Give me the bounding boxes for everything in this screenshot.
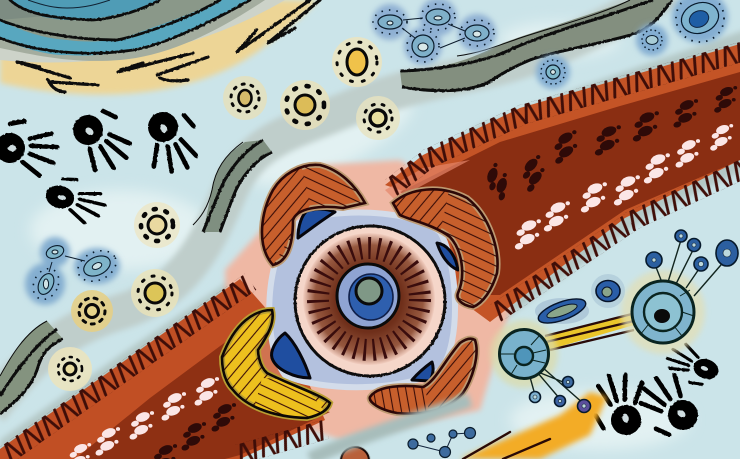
- sun: 245,98: [223, 76, 267, 120]
- dark footprints, upper track: [477, 85, 737, 203]
- blue waterhole: 553,72: [536, 55, 570, 89]
- tan band dashes: [17, 0, 320, 92]
- boomerang: top-left: [259, 162, 370, 268]
- large circle: [632, 281, 694, 343]
- outer ring: [295, 226, 445, 376]
- snake: middle: [193, 140, 272, 232]
- boomerang: top-right: [390, 185, 505, 310]
- linked blue dots, bottom: [408, 428, 476, 458]
- sun: 305,105: [280, 80, 330, 130]
- small circle: [500, 330, 548, 378]
- blue ring: [591, 274, 625, 308]
- satellite dots: [530, 230, 738, 412]
- boomerang: yellow bottom-left: [215, 305, 335, 425]
- orange brush stroke with lines: [460, 392, 607, 459]
- handprints, top-left: [0, 99, 208, 227]
- sun: 70,369: [48, 347, 92, 391]
- centre eye: [337, 264, 399, 328]
- brown radial disc: [303, 233, 435, 365]
- sun: 157,225: [134, 202, 180, 248]
- radial strokes: [318, 248, 420, 350]
- upper-right red track: [385, 44, 740, 322]
- dark footprints, lower track: [152, 402, 236, 459]
- sun: 378,118: [356, 96, 400, 140]
- handprints, bottom-right: [587, 340, 724, 446]
- lower-left red track: [0, 279, 330, 459]
- yellow track: [542, 313, 634, 350]
- glow: [621, 270, 705, 354]
- sun: 92,311: [71, 290, 113, 332]
- blue waterhole: 652,40: [636, 24, 668, 56]
- sun: 357,62: [332, 37, 382, 87]
- bottom grey band: [310, 400, 470, 459]
- blue wedges: [272, 209, 458, 381]
- satellite centres: [533, 234, 731, 408]
- connected circles, right: [490, 230, 738, 412]
- snake: bottom left: [0, 321, 63, 414]
- blue waterhole: 700,17: [672, 0, 728, 43]
- central meeting place: [269, 213, 455, 387]
- blue rounded square: [269, 213, 455, 387]
- linked blue waterholes, left: [25, 237, 121, 305]
- sun: 155,293: [131, 269, 179, 317]
- snake: top right: [400, 0, 672, 92]
- small brown circle at bottom edge: [339, 445, 371, 459]
- boomerang: bottom-right: [365, 335, 480, 420]
- white footprints, upper track: [514, 123, 733, 251]
- sun circles: [48, 37, 400, 391]
- salmon centre ground: [225, 160, 510, 440]
- glow: [490, 320, 558, 388]
- white footprints, lower track: [67, 376, 219, 459]
- blue ellipse: [535, 294, 589, 328]
- linked blue waterholes, top: [372, 0, 496, 65]
- water hole: top-left concentric bands: [0, 0, 320, 95]
- stems: [530, 240, 727, 404]
